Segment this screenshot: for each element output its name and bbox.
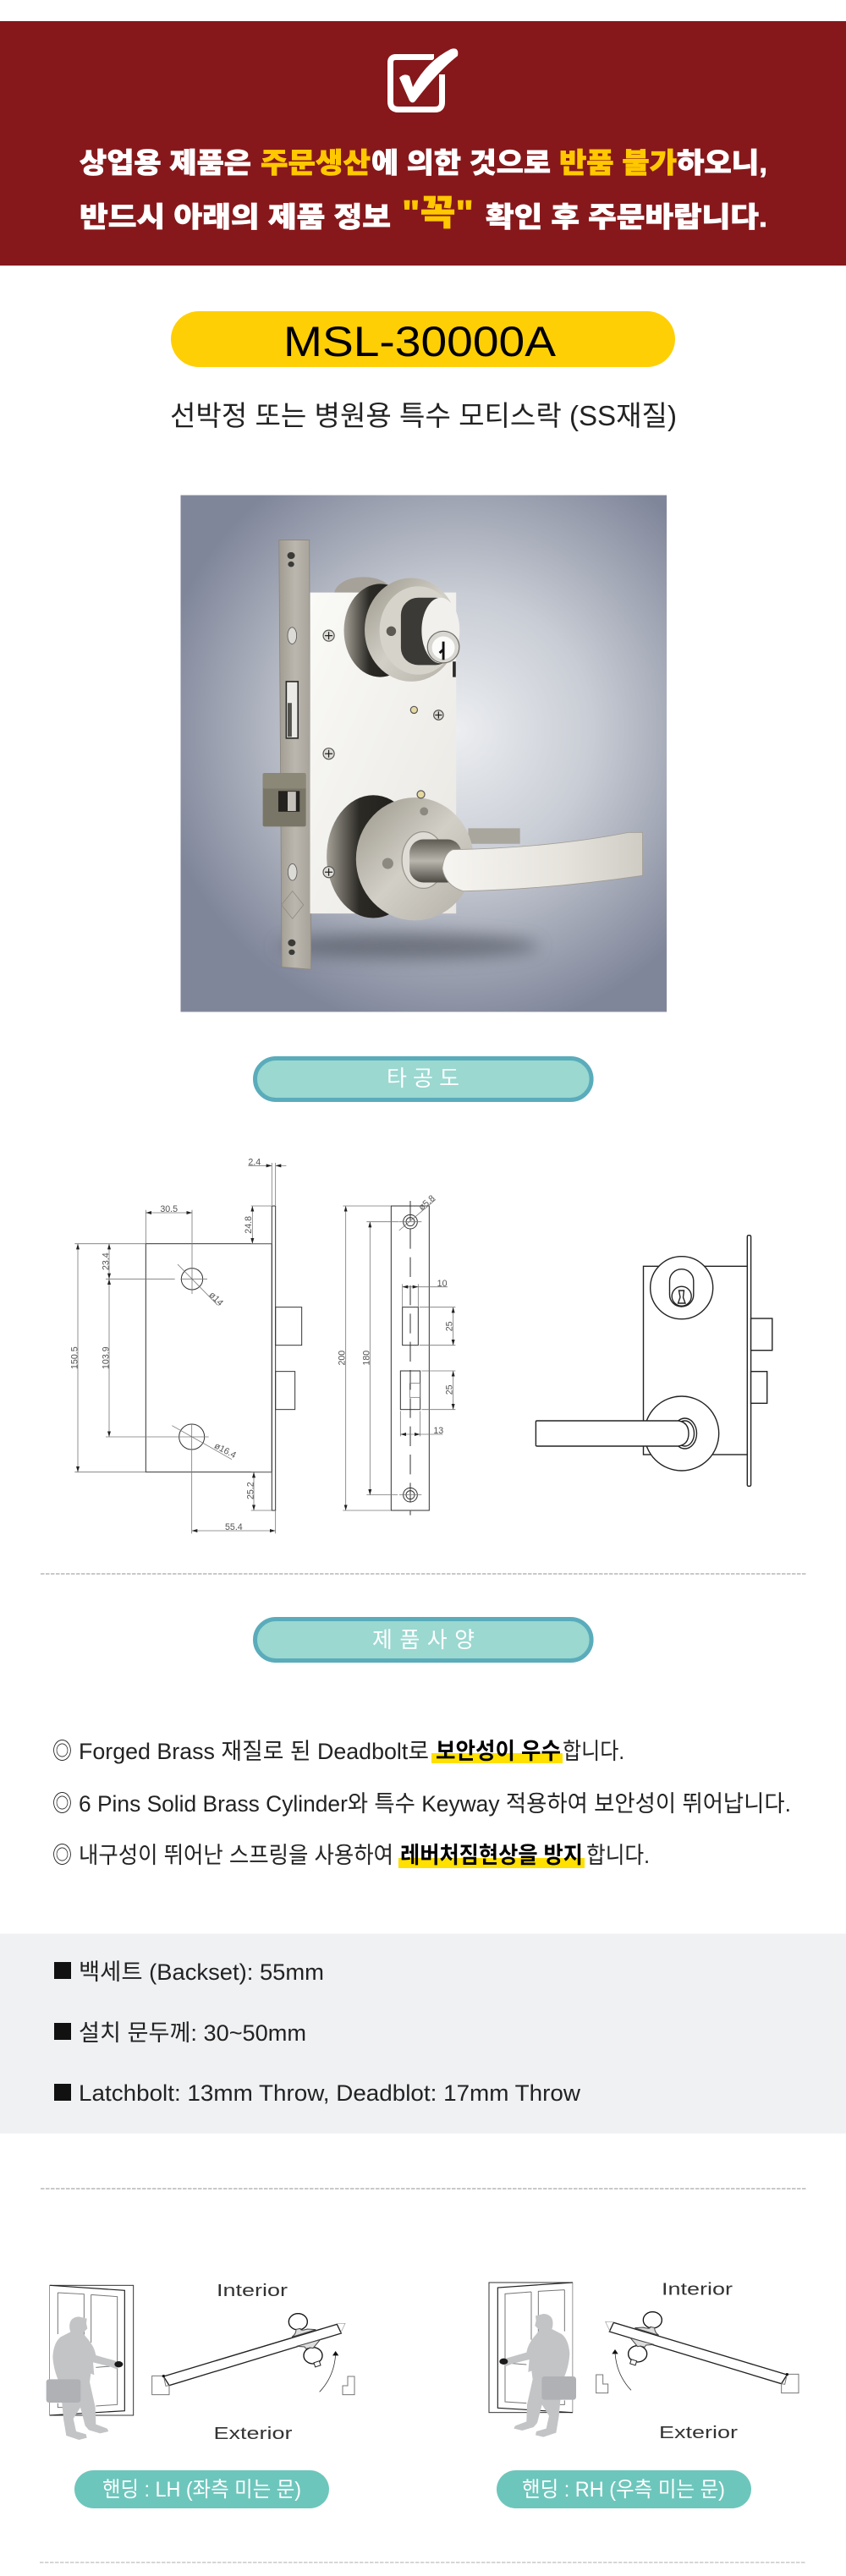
banner: notice	[0, 21, 846, 266]
banner line 2: 확인 후 주문바랍니다.	[486, 201, 767, 233]
panel: specifications	[0, 1933, 846, 2134]
technical drawing: lock side dimensions: ø16.4	[212, 1441, 238, 1461]
technical drawing: lock side dimensions: 55.4	[225, 1522, 243, 1532]
technical drawing: strike plate dimensions: 25	[444, 1321, 454, 1331]
feature 1: 보안성이 우수	[436, 1739, 561, 1764]
plan: door swing RH	[596, 2312, 799, 2393]
technical drawing: lock side dimensions: 25.2	[245, 1482, 255, 1499]
lever rose	[327, 795, 474, 920]
pill: LH: 핸딩 : LH (좌측 미는 문)	[102, 2478, 301, 2502]
handing diagram: left hand	[47, 2282, 354, 2508]
screws	[323, 630, 443, 878]
technical drawing: strike plate dimensions: ø5.8	[417, 1193, 437, 1213]
technical drawing: strike plate dimensions	[338, 1193, 455, 1515]
section tab: drilling diagram	[255, 1059, 591, 1099]
banner line 2	[80, 193, 767, 233]
spec: bolts: Latchbolt: 13mm Throw, Deadblot: 17mm Throw	[79, 2080, 581, 2106]
label: exterior: Exterior	[213, 2425, 293, 2443]
icon: checkbox	[391, 48, 458, 109]
feature 2: 6 Pins Solid Brass Cylinder와 특수 Keyway 적용하여 보안성이 뛰어납니다.	[79, 1791, 791, 1817]
technical drawing: strike plate dimensions: 25	[444, 1384, 454, 1395]
figure: person at door RH	[489, 2283, 576, 2437]
latch	[263, 773, 306, 826]
banner line 1	[80, 147, 767, 178]
divider 1	[41, 1573, 806, 1575]
case plate	[310, 593, 456, 913]
handing diagram: right hand	[489, 2280, 799, 2508]
feature 1: Forged Brass 재질로 된 Deadbolt로	[79, 1739, 429, 1764]
divider 3	[40, 2562, 806, 2563]
model name pill: MSL-30000A	[283, 318, 557, 365]
technical drawing: strike plate dimensions: 13	[433, 1426, 443, 1436]
banner line 1: 주문생산	[261, 147, 371, 178]
label: exterior: Exterior	[659, 2424, 738, 2442]
pill: RH	[497, 2470, 751, 2508]
top rose back rim	[334, 577, 388, 593]
feature list	[52, 1739, 791, 1868]
pill: LH	[74, 2470, 329, 2508]
product photo: mortise lock	[180, 496, 667, 1012]
lever back	[468, 828, 520, 844]
feature 3: 합니다.	[586, 1843, 650, 1868]
technical drawing: lock side dimensions: 2.4	[248, 1158, 261, 1168]
divider 2	[41, 2188, 806, 2190]
pill: RH: 핸딩 : RH (우측 미는 문)	[522, 2478, 725, 2502]
technical drawing: lock side dimensions: 103.9	[101, 1346, 111, 1369]
banner line 2: "꼭"	[402, 193, 474, 233]
lever	[442, 832, 643, 891]
banner line 1: 하오니,	[677, 147, 767, 178]
spec: door thickness: 설치 문두께: 30~50mm	[79, 2020, 306, 2046]
technical drawing: assembled lock front view	[536, 1236, 772, 1486]
section tab: specifications: 제품사양	[372, 1627, 475, 1652]
technical drawing: lock side dimensions: 24.8	[244, 1216, 254, 1234]
banner line 1: 반품 불가	[559, 147, 677, 178]
technical drawing: strike plate dimensions: 10	[437, 1279, 448, 1289]
figure: person at door LH	[47, 2285, 134, 2440]
feature 2: ◎	[52, 1791, 72, 1817]
technical drawing: lock side dimensions: 23.4	[101, 1252, 111, 1270]
technical drawing: lock side dimensions: 150.5	[69, 1346, 80, 1369]
technical drawing: lock side dimensions	[69, 1158, 302, 1533]
section tab: specifications	[255, 1619, 591, 1661]
banner line 1: 상업용 제품은	[80, 147, 251, 178]
feature 3: 내구성이 뛰어난 스프링을 사용하여	[79, 1843, 393, 1868]
subtitle: 선박정 또는 병원용 특수 모티스락 (SS재질)	[170, 400, 677, 431]
deadbolt slot	[286, 682, 298, 738]
feature 3	[52, 1843, 650, 1868]
banner line 1: 에 의한 것으로	[371, 147, 551, 178]
spec: backset: 백세트 (Backset): 55mm	[79, 1959, 324, 1985]
label: interior: Interior	[217, 2282, 288, 2300]
feature 1	[52, 1739, 624, 1764]
feature 1: 합니다.	[563, 1739, 624, 1764]
plan: door swing LH	[152, 2314, 354, 2395]
feature 1: ◎	[52, 1739, 72, 1764]
feature 3: 레버처짐현상을 방지	[400, 1843, 583, 1868]
section tab: drilling diagram: 타공도	[387, 1066, 459, 1091]
feature 3: ◎	[52, 1843, 72, 1868]
model name pill	[171, 311, 675, 367]
technical drawing: lock side dimensions: ø14	[207, 1290, 225, 1308]
technical drawing: lock side dimensions: 30.5	[160, 1204, 178, 1214]
banner line 2: 반드시 아래의 제품 정보	[80, 201, 391, 233]
technical drawing: strike plate dimensions: 180	[362, 1351, 372, 1366]
technical drawing: strike plate dimensions: 200	[338, 1351, 348, 1366]
label: interior: Interior	[662, 2280, 733, 2299]
cylinder assembly	[344, 578, 459, 682]
faceplate	[279, 540, 311, 969]
